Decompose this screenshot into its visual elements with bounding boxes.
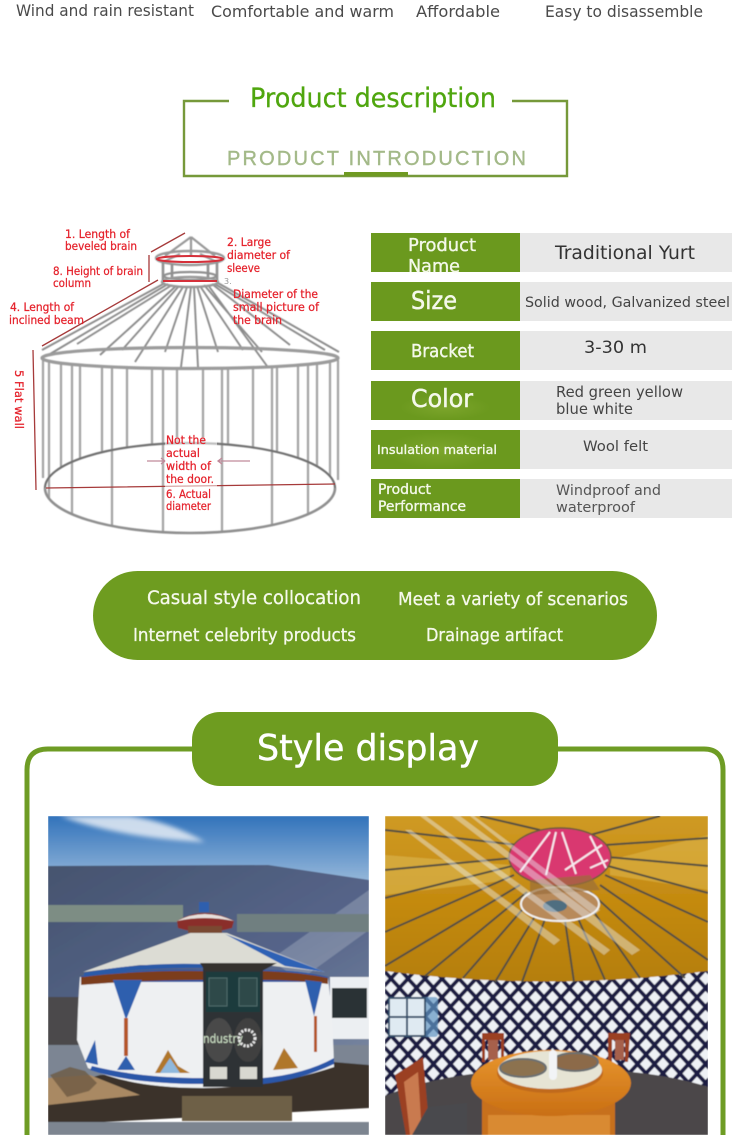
diagram annotations: diameter of [227, 248, 291, 262]
diagram annotations: sleeve [227, 261, 260, 275]
light rays [405, 816, 640, 955]
diagram annotations: beveled brain [65, 239, 137, 253]
diagram annotations: 6. Actual [166, 487, 211, 501]
diagram annotations: 1. Length of [65, 227, 131, 241]
row: color: Red green yellow [556, 383, 683, 401]
row: product performance: waterproof [556, 500, 636, 516]
row: product name: Traditional Yurt [554, 242, 695, 264]
specification table [371, 233, 732, 518]
photo: yurt exterior [48, 816, 369, 1135]
row: size: Size [411, 286, 457, 315]
green feature pill [93, 571, 657, 660]
skylight [509, 828, 611, 886]
heading: style display: Style display [257, 728, 479, 769]
diagram annotations: 4. Length of [10, 300, 75, 314]
row: insulation material [371, 430, 732, 469]
door mask [165, 437, 217, 512]
row: bracket: 3-30 m [584, 338, 647, 358]
diagram annotations: width of [166, 459, 212, 473]
row: insulation material: Insulation material [377, 442, 497, 457]
row: bracket: Bracket [411, 341, 474, 362]
diagram annotations: 8. Height of brain [53, 264, 143, 278]
diagram annotations: Not the [166, 433, 206, 447]
heading: product description: PRODUCT INTRODUCTION [227, 148, 526, 170]
yurt frame diagram [9, 227, 339, 533]
row: product name: Name [408, 256, 460, 277]
row: color [371, 381, 732, 420]
row: size [371, 282, 732, 321]
top feature labels: Easy to disassemble [545, 2, 703, 21]
row: color: Color [411, 384, 474, 413]
green feature pill: Internet celebrity products [133, 625, 356, 646]
diagram annotations: diameter [166, 499, 211, 513]
row: product performance: Product [378, 482, 432, 498]
top feature labels: Affordable [416, 2, 500, 21]
diagram annotations: inclined beam [9, 313, 84, 327]
photo: yurt exterior: ndustry [203, 1031, 244, 1046]
row: product performance [371, 479, 732, 518]
green feature pill: Meet a variety of scenarios [398, 589, 628, 610]
top feature labels: Wind and rain resistant [16, 1, 194, 20]
top feature labels [16, 1, 703, 21]
diagram annotations: 2. Large [227, 235, 271, 249]
row: color: blue white [556, 400, 633, 418]
diagram annotations: small picture of [233, 300, 320, 314]
diagram annotations [9, 227, 320, 513]
row: product name: Product [408, 235, 476, 256]
panel: style display frame [27, 749, 723, 1135]
heading: style display [192, 712, 558, 786]
table [481, 1100, 616, 1135]
heading: product description [184, 83, 567, 176]
row: product name [371, 233, 732, 277]
roof ribs [385, 816, 708, 982]
ceiling medallion [521, 887, 599, 921]
row: product performance: Windproof and [556, 483, 661, 499]
diagram annotations: actual [166, 446, 200, 460]
heading: product description: Product description [250, 83, 496, 114]
green feature pill: Casual style collocation [147, 587, 361, 609]
row: size: Solid wood, Galvanized steel [525, 295, 730, 311]
chairs [395, 1033, 630, 1135]
diagram annotations: 3. [224, 277, 232, 286]
row: product performance: Performance [378, 499, 466, 515]
diagram annotations: the brain [233, 313, 282, 327]
diagram annotations: Diameter of the [233, 287, 318, 301]
row: insulation material: Wool felt [583, 439, 648, 455]
wall posts and rings [42, 237, 339, 533]
photo: yurt interior [385, 816, 708, 1135]
top feature labels: Comfortable and warm [211, 2, 394, 21]
row: bracket [371, 331, 732, 370]
diagram annotations: the door. [166, 472, 214, 486]
red measurement lines [33, 233, 335, 490]
diagram annotations: column [53, 276, 91, 290]
green feature pill: Drainage artifact [426, 625, 563, 646]
diagram annotations: 5 Flat wall [12, 370, 26, 429]
